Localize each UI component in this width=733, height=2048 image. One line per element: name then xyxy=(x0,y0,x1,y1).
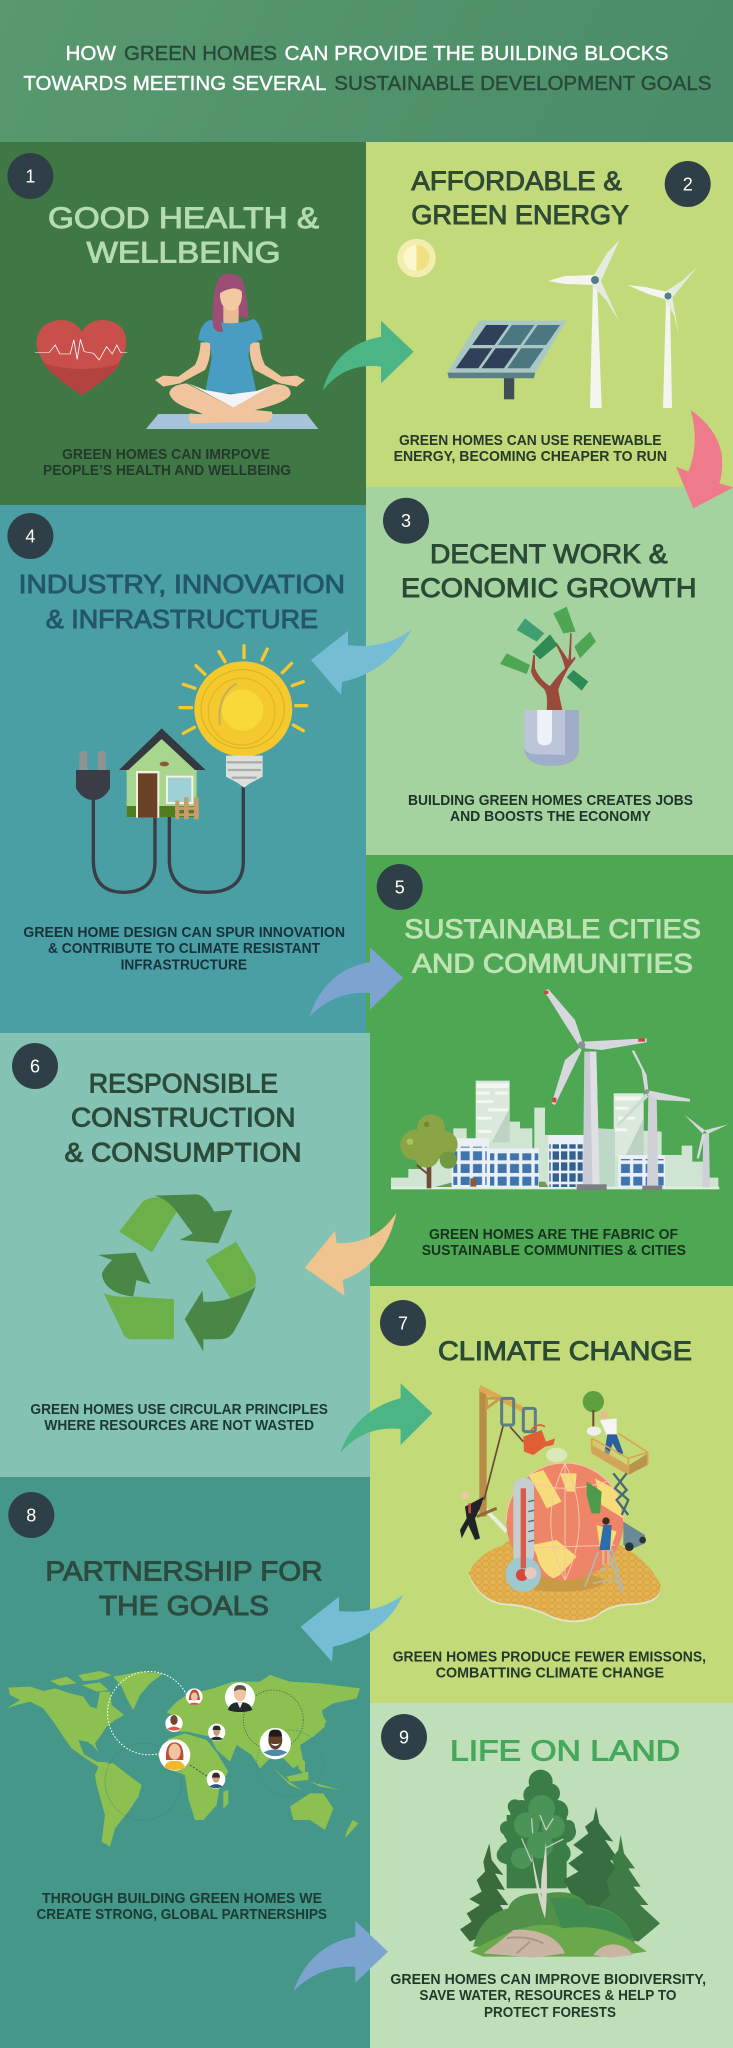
text: climate change: COMBATTING CLIMATE CHANGE xyxy=(436,1665,664,1682)
number badge 4 xyxy=(7,513,53,559)
panel: 1 good health and wellbeing xyxy=(0,142,366,506)
panel: 7 climate change xyxy=(370,1286,733,1703)
text: partnership: THROUGH BUILDING GREEN HOMES WE xyxy=(42,1890,322,1907)
text: decent work: BUILDING GREEN HOMES CREATES JOBS xyxy=(408,792,693,809)
text: energy: GREEN HOMES CAN USE RENEWABLE xyxy=(399,432,662,449)
icon: sun xyxy=(397,239,436,277)
panel: 9 life on land xyxy=(370,1703,733,2048)
text: climate change xyxy=(393,1649,706,1682)
heading: responsible xyxy=(64,1069,302,1167)
text: partnership xyxy=(36,1890,327,1923)
text: cities: SUSTAINABLE COMMUNITIES & CITIES xyxy=(422,1242,686,1259)
text: life on land: SAVE WATER, RESOURCES & HELP TO xyxy=(419,1987,677,2004)
arrow: 6 to 7 xyxy=(340,1383,432,1453)
icon: solar panel xyxy=(447,321,567,399)
text: life on land xyxy=(390,1971,706,2021)
title: HOW xyxy=(66,43,116,65)
text: responsible: GREEN HOMES USE CIRCULAR PRINCIPLES xyxy=(30,1401,328,1418)
number badge 8: 8 xyxy=(26,1506,36,1526)
icon: heart with pulse xyxy=(35,320,127,395)
text: cities xyxy=(422,1226,686,1259)
number badge 3: 3 xyxy=(401,511,411,531)
arrow: 8 to 9 xyxy=(294,1921,388,1991)
number badge 5 xyxy=(377,864,423,910)
heading: decent work: DECENT WORK & xyxy=(430,539,668,569)
number badge 4: 4 xyxy=(25,526,35,546)
text: climate change: GREEN HOMES PRODUCE FEWER EMISSONS, xyxy=(393,1649,706,1666)
number badge 9 xyxy=(381,1714,427,1760)
arrow: 3 to 4 xyxy=(311,629,412,695)
panel: 6 responsible construction and consumption xyxy=(0,1033,370,1477)
text: life on land: GREEN HOMES CAN IMPROVE BIODIVERSITY, xyxy=(390,1971,706,1988)
text: partnership: CREATE STRONG, GLOBAL PARTNERSHIPS xyxy=(36,1906,327,1923)
heading: partnership: THE GOALS xyxy=(99,1590,269,1621)
text: cities: GREEN HOMES ARE THE FABRIC OF xyxy=(429,1226,678,1243)
heading: sustainable cities xyxy=(404,914,701,978)
arrow: 2 to 3 xyxy=(676,410,733,508)
heading: sustainable cities: AND COMMUNITIES xyxy=(412,948,693,978)
number badge 7: 7 xyxy=(398,1314,408,1334)
text: decent work: AND BOOSTS THE ECONOMY xyxy=(450,808,651,825)
heading: decent work: ECONOMIC GROWTH xyxy=(401,573,697,603)
text: health xyxy=(43,446,291,479)
title: TOWARDS MEETING SEVERAL xyxy=(23,73,326,95)
text: industry: & CONTRIBUTE TO CLIMATE RESISTANT xyxy=(48,940,320,957)
header banner xyxy=(0,0,733,142)
number badge 2: 2 xyxy=(683,174,693,194)
icon: money tree in pot xyxy=(500,607,596,766)
number badge 3 xyxy=(383,498,429,544)
panel: 5 sustainable cities and communities xyxy=(366,855,733,1286)
number badge 2 xyxy=(665,161,711,207)
heading: sustainable cities: SUSTAINABLE CITIES xyxy=(404,914,701,944)
number badge 1: 1 xyxy=(25,166,35,186)
heading: good health xyxy=(48,202,319,270)
text: health: GREEN HOMES CAN IMRPOVE xyxy=(62,446,270,463)
panel: 4 industry, innovation and infrastructure xyxy=(0,505,366,1033)
heading: industry xyxy=(19,569,345,634)
illustration: city with wind turbines xyxy=(391,989,728,1190)
heading: industry: & INFRASTRUCTURE xyxy=(46,604,318,634)
heading: industry: INDUSTRY, INNOVATION xyxy=(19,569,345,599)
number badge 8 xyxy=(8,1492,54,1538)
text: responsible: WHERE RESOURCES ARE NOT WASTED xyxy=(44,1417,314,1434)
heading: good health: WELLBEING xyxy=(86,237,280,270)
panel: 3 decent work and economic growth xyxy=(366,487,733,855)
icon: woman meditating xyxy=(146,274,318,429)
text: health: PEOPLE’S HEALTH AND WELLBEING xyxy=(43,462,291,479)
title: CAN PROVIDE THE BUILDING BLOCKS xyxy=(284,43,668,65)
number badge 9: 9 xyxy=(399,1728,409,1748)
illustration: forest trees xyxy=(460,1770,660,1958)
heading: partnership xyxy=(45,1556,323,1621)
heading: responsible: CONSTRUCTION xyxy=(71,1103,296,1133)
text: industry xyxy=(23,924,345,974)
arrow: 7 to 8 xyxy=(301,1595,403,1662)
heading: responsible: & CONSUMPTION xyxy=(64,1137,302,1167)
number badge 7 xyxy=(380,1300,426,1346)
title: SUSTAINABLE DEVELOPMENT GOALS xyxy=(334,73,712,95)
number badge 6 xyxy=(12,1043,58,1089)
text: industry: GREEN HOME DESIGN CAN SPUR INNOVATION xyxy=(23,924,345,941)
illustration: globe, thermometer and people xyxy=(460,1385,661,1622)
text: decent work xyxy=(408,792,693,825)
panel: 2 affordable and green energy xyxy=(366,142,733,487)
text: energy xyxy=(394,432,667,465)
panel: 8 partnership for the goals xyxy=(0,1477,370,2048)
number badge 1 xyxy=(7,153,53,199)
title xyxy=(23,43,711,95)
text: life on land: PROTECT FORESTS xyxy=(484,2004,616,2021)
number badge 5: 5 xyxy=(395,878,405,898)
heading: energy: AFFORDABLE & xyxy=(411,166,622,196)
arrow: 5 to 6 xyxy=(305,1213,396,1296)
title: GREEN HOMES xyxy=(124,43,277,65)
number badge 6: 6 xyxy=(30,1056,40,1076)
text: energy: ENERGY, BECOMING CHEAPER TO RUN xyxy=(394,448,667,465)
heading: good health: GOOD HEALTH & xyxy=(48,202,319,235)
arrow: 4 to 5 xyxy=(310,948,403,1017)
heading: decent work xyxy=(401,539,697,603)
heading: energy xyxy=(411,166,629,230)
heading: responsible: RESPONSIBLE xyxy=(89,1069,278,1099)
heading: partnership: PARTNERSHIP FOR xyxy=(45,1556,323,1587)
map: world map with people xyxy=(7,1671,360,1847)
text: responsible xyxy=(30,1401,328,1434)
icon: recycling symbol xyxy=(98,1194,256,1352)
heading: energy: GREEN ENERGY xyxy=(411,200,629,230)
icon: house, bulb and plug xyxy=(76,646,307,892)
heading: life on land: LIFE ON LAND xyxy=(450,1736,680,1768)
text: industry: INFRASTRUCTURE xyxy=(121,957,247,974)
icon: wind turbines xyxy=(548,240,698,408)
heading: climate change: CLIMATE CHANGE xyxy=(438,1336,692,1366)
avatars: people in circles xyxy=(159,1682,291,1789)
arrow: 1 to 2 xyxy=(323,321,414,391)
